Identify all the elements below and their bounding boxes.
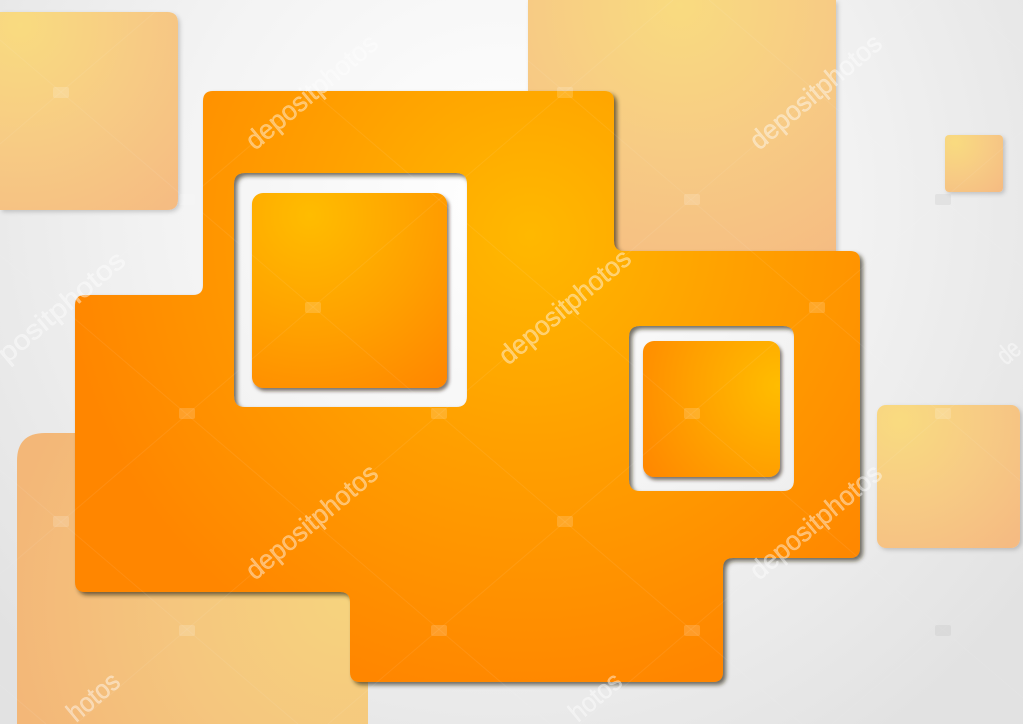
- inner orange square: large: [252, 193, 447, 388]
- main orange shape with two square cut-outs: [75, 91, 860, 682]
- inner orange square: small: [643, 341, 780, 477]
- watermark camera marks: [53, 87, 951, 636]
- light square: right: [877, 405, 1020, 548]
- watermark text group: depositphotos: [240, 28, 384, 156]
- light square: small top right: [945, 135, 1003, 192]
- watermark text group: depositphotos: [744, 458, 888, 586]
- light square: top left: [0, 12, 178, 210]
- watermark text group: depositphotos: [744, 28, 888, 156]
- watermark text group: depositphotos: [493, 243, 637, 371]
- light rectangle: top centre: [528, 0, 836, 262]
- watermark text group: depositphotos: [240, 458, 384, 586]
- light rectangle: bottom left: [17, 433, 368, 724]
